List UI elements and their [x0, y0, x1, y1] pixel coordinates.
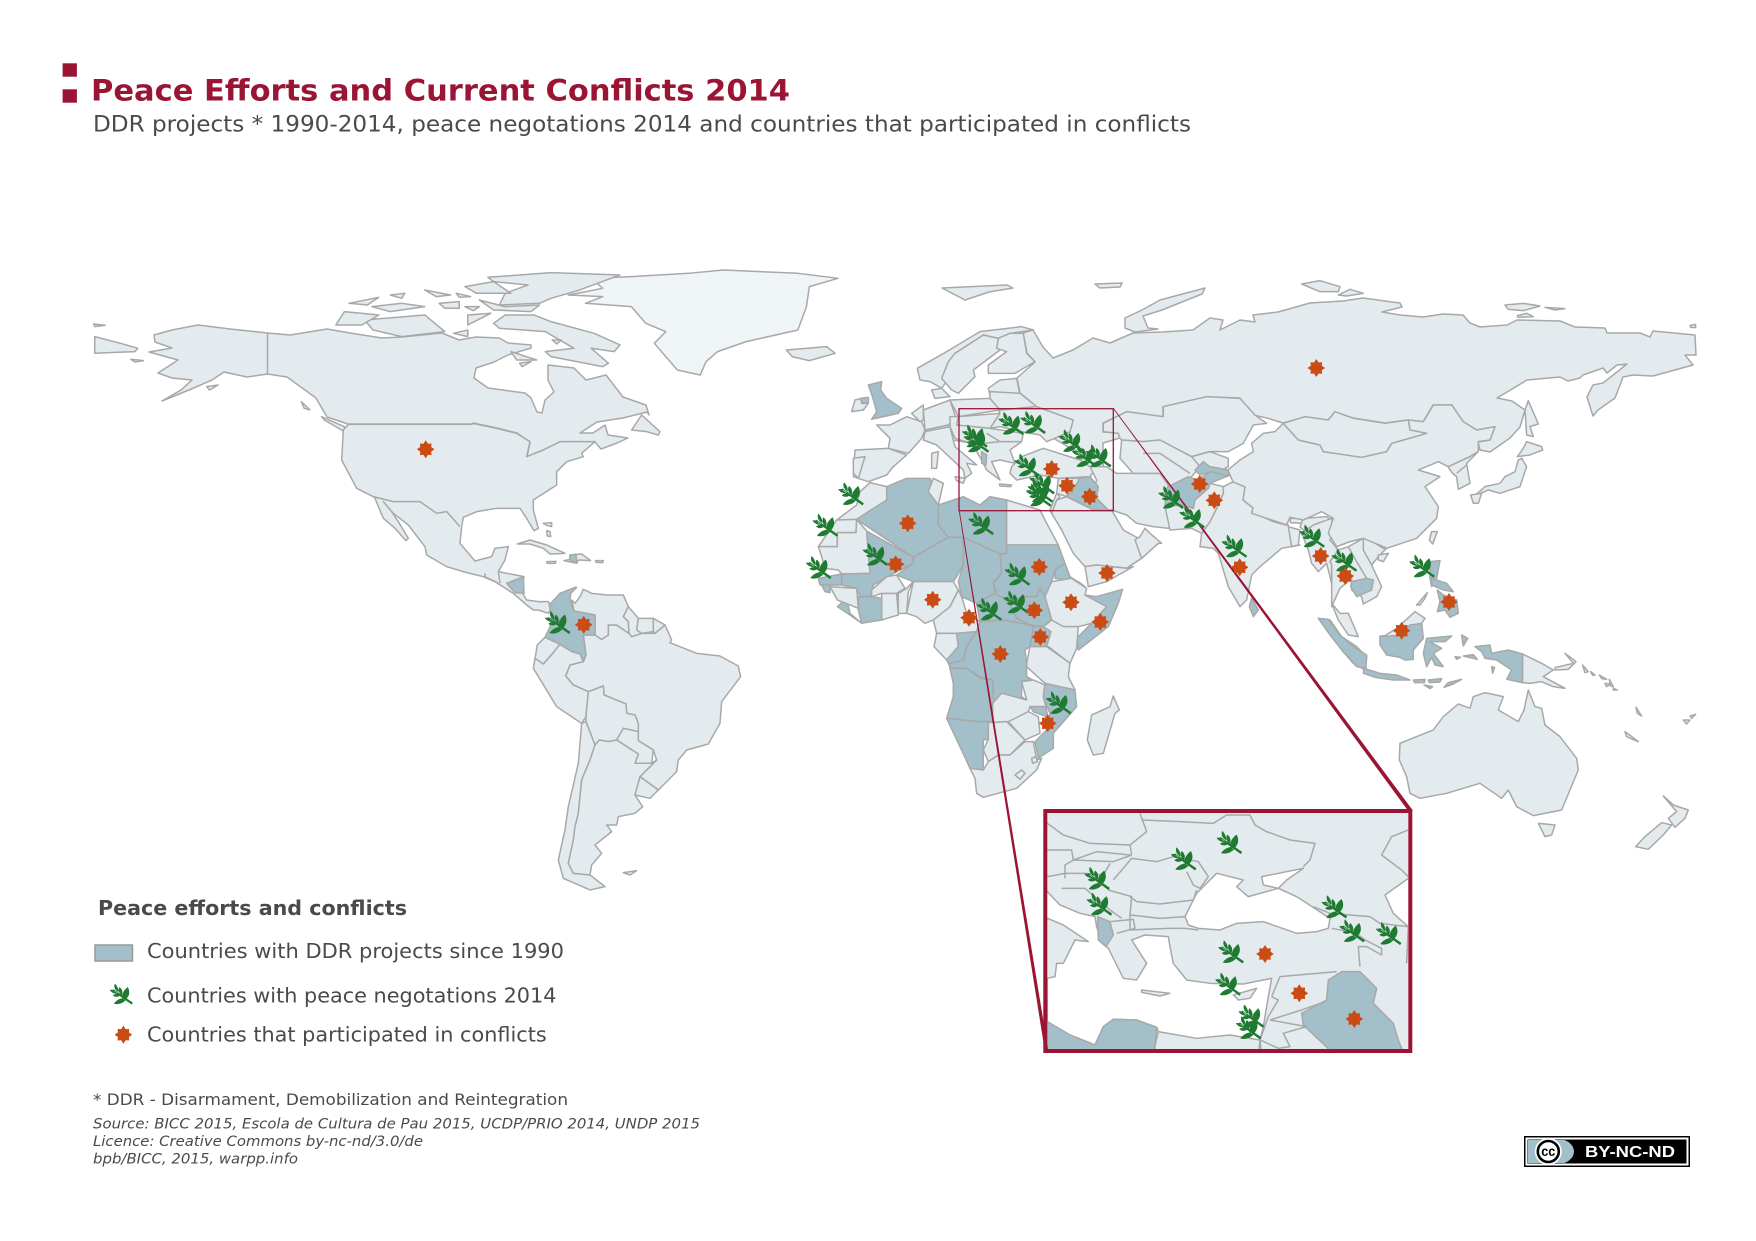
icon: star Pakistan: [1206, 491, 1223, 509]
map: USA, Mexico, Central America, Caribbean: [342, 415, 660, 613]
icon: branch Mali: [863, 543, 888, 566]
icon: branch Bosnia: [963, 425, 987, 447]
icon: branch Afghanistan: [1159, 486, 1183, 509]
icon: branch Armenia Azerbaijan: [1086, 445, 1111, 467]
icon: inset branch Cyprus: [1216, 973, 1240, 995]
inset map: Europe and Middle East enlargement: [1040, 811, 1413, 1057]
icon: star Ethiopia: [1062, 593, 1080, 611]
icon: star Yemen: [1098, 564, 1116, 582]
legend icon: star: [115, 1026, 132, 1044]
icon: star Somalia: [1092, 613, 1109, 631]
icon: branch Kosovo: [964, 430, 989, 452]
map: Russia: [1017, 298, 1696, 457]
icon: inset star Syria: [1290, 984, 1308, 1002]
icon: star Myanmar: [1312, 547, 1330, 565]
icon: star Syria: [1058, 477, 1076, 495]
icon: star Nigeria: [924, 591, 942, 609]
icon: inset branch Georgia: [1340, 920, 1364, 942]
icon: branch Russia Caucasus: [1059, 430, 1084, 452]
connector lines from locator to inset: [959, 408, 1412, 1052]
icon: inset branch Russia Caucasus: [1322, 896, 1347, 918]
icon: star Turkey: [1043, 460, 1060, 478]
map: Africa: [818, 478, 1123, 797]
icon: star Thailand: [1336, 567, 1354, 585]
title marker: [63, 63, 77, 103]
CC BY-NC-ND badge: BY-NC-ND: [1585, 1144, 1675, 1161]
legend heading: Peace efforts and conflicts: [98, 896, 407, 920]
icon: branch Lebanon: [1028, 480, 1053, 502]
map: South America: [533, 587, 741, 890]
icon: star Mozambique: [1039, 714, 1056, 732]
legend label: peace negotiations: Countries with peace negotations 2014: [147, 983, 556, 1007]
conflict markers: [417, 359, 1458, 732]
icon: branch Myanmar: [1300, 525, 1324, 547]
map: East Asia: [1228, 281, 1696, 587]
icon: branch South Sudan: [1004, 591, 1028, 613]
icon: branch Mozambique: [1046, 692, 1071, 714]
map: Arctic Canada, Greenland, Iceland: [94, 270, 838, 432]
icon: inset branch Israel Palestine: [1236, 1017, 1261, 1039]
icon: star Russia: [1308, 359, 1325, 377]
icon: branch Turkey: [1015, 454, 1039, 476]
icon: branch Israel Palestine: [1026, 484, 1051, 506]
peace negotiation markers: [545, 411, 1434, 714]
icon: branch Ukraine: [1021, 411, 1045, 434]
icon: branch Cyprus: [1030, 472, 1054, 494]
subtitle: DDR projects * 1990-2014, peace negotations 2014 and countries that participated in conflicts: [93, 112, 1191, 138]
legend label: conflicts: Countries that participated in conflicts: [147, 1022, 547, 1046]
icon: inset branch Moldova: [1171, 848, 1196, 870]
map: Europe and Middle East: [852, 327, 1267, 587]
icon: star Malaysia: [1393, 622, 1410, 640]
icon: star India: [1231, 558, 1248, 576]
inset markers: [1085, 831, 1401, 1039]
inset frame: [1045, 811, 1410, 1051]
title: Peace Efforts and Current Conflicts 2014: [91, 74, 790, 108]
icon: branch Moldova: [999, 412, 1023, 435]
icon: branch India: [1222, 535, 1247, 557]
icon: branch Thailand: [1332, 549, 1357, 571]
icon: branch Morocco: [839, 483, 863, 505]
source and licence: bpb/BICC, 2015, warpp.info: [93, 1152, 298, 1168]
icon: branch Central African Republic: [977, 598, 1001, 620]
icon: branch Pakistan: [1180, 506, 1204, 528]
icon: inset branch Bosnia: [1085, 867, 1109, 890]
icon: star Iraq: [1081, 488, 1098, 506]
icon: star Afghanistan: [1191, 475, 1208, 493]
icon: star Uganda: [1032, 628, 1049, 646]
world map: [94, 270, 1696, 890]
source and licence: Licence: Creative Commons by-nc-nd/3.0/de: [93, 1134, 423, 1150]
icon: inset star Iraq: [1346, 1010, 1363, 1028]
icon: star Mali: [887, 555, 904, 573]
map: South and Southeast Asia: [1165, 462, 1387, 670]
icon: inset branch Lebanon: [1239, 1005, 1264, 1027]
icon: branch Sudan: [1005, 563, 1030, 585]
icon: star USA: [417, 440, 434, 458]
icon: star Algeria: [899, 514, 916, 532]
icon: branch Colombia: [545, 611, 570, 634]
icon: inset branch Kosovo: [1087, 893, 1112, 915]
footnote: * DDR - Disarmament, Demobilization and Reintegration: [93, 1090, 568, 1109]
icon: inset branch Ukraine: [1217, 831, 1242, 854]
source and licence: Source: BICC 2015, Escola de Cultura de Pau 2015, UCDP/PRIO 2014, UNDP 2015: [93, 1116, 700, 1132]
map: Arctic Russia and Svalbard: [942, 283, 1205, 332]
icon: inset branch Armenia Azerbaijan: [1376, 922, 1401, 945]
icon: branch Philippines: [1410, 555, 1434, 577]
icon: inset branch Turkey: [1219, 941, 1243, 963]
icon: star DR Congo: [992, 645, 1009, 663]
icon: branch Western Sahara: [813, 514, 838, 536]
CC BY-NC-ND badge: cc: [1541, 1144, 1556, 1159]
icon: star Colombia: [575, 616, 592, 634]
icon: star Sudan: [1030, 558, 1048, 576]
legend: [95, 896, 564, 1046]
legend swatch: DDR countries: [95, 945, 132, 961]
legend icon: branch: [110, 984, 132, 1004]
locator box on map: [959, 409, 1113, 511]
icon: star South Sudan: [1026, 601, 1043, 619]
CC BY-NC-ND badge: [1524, 1136, 1690, 1167]
map: North America mainland north: [149, 325, 649, 457]
icon: star Cameroon: [960, 609, 978, 627]
icon: star Philippines: [1440, 593, 1458, 611]
legend label: DDR: Countries with DDR projects since 1990: [147, 939, 564, 963]
icon: inset star Turkey: [1256, 945, 1274, 963]
icon: branch Libya: [969, 512, 993, 535]
source and licence: [93, 1116, 700, 1168]
map: Indonesia, New Guinea, Australia, New Zealand: [1318, 578, 1696, 849]
icon: branch Georgia: [1072, 445, 1097, 467]
icon: branch Senegal: [806, 556, 831, 579]
